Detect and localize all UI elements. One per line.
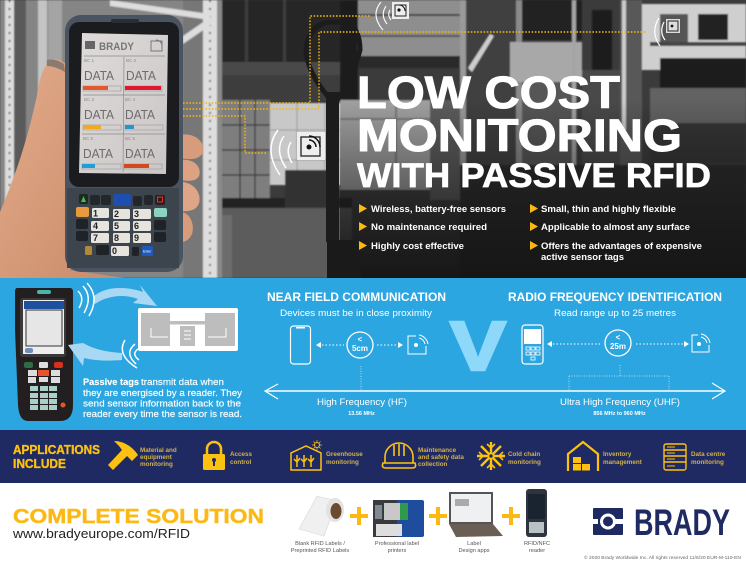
screen: DATA	[83, 146, 113, 161]
heading: applications include	[13, 443, 100, 471]
product captions: Design apps	[458, 548, 490, 554]
product captions: Label	[467, 541, 481, 547]
versus V: V	[450, 307, 506, 385]
label: access control	[230, 451, 253, 466]
keypad	[76, 194, 167, 256]
label: material and equipment: Material and	[140, 447, 177, 454]
feature bullets: active sensor tags	[541, 252, 624, 263]
label: maintenance and safety: collection	[418, 461, 448, 468]
product: label printer	[373, 500, 424, 537]
website url: www.bradyeurope.com/RFID	[12, 527, 190, 541]
label: inventory management: Inventory	[603, 451, 632, 458]
waves from reader	[78, 283, 94, 316]
screen: BC 5	[83, 136, 94, 141]
product captions: RFID/NFC	[524, 541, 550, 547]
keypad: 2	[114, 209, 119, 219]
heading: near field communication: NEAR FIELD COMMUNICATION	[267, 292, 446, 304]
icon: greenhouse	[291, 440, 322, 470]
icon: RFID tag top	[376, 2, 409, 30]
keypad: 8	[114, 233, 119, 243]
icon: lock	[203, 442, 225, 470]
product captions: Blank RFID Labels /	[295, 541, 345, 547]
feature bullets: Wireless, battery-free sensors	[371, 204, 506, 215]
NFC range diagram: <	[358, 335, 363, 344]
hand holding reader	[0, 59, 203, 278]
heading: radio frequency identification	[508, 292, 722, 318]
screen: DATA	[125, 107, 155, 122]
passive tags description: Passive tags	[83, 377, 139, 387]
title: MONITORING	[357, 110, 682, 161]
frequency axis arrow	[265, 365, 725, 399]
label: access control: control	[230, 459, 252, 466]
screen: BC 3	[84, 97, 95, 102]
label: greenhouse monitoring: Greenhouse	[326, 451, 363, 458]
feature bullets: No maintenance required	[371, 222, 487, 233]
screen: DATA	[84, 68, 114, 83]
passive tags description	[83, 377, 242, 419]
heading: near field communication: Devices must be in close proximity	[280, 308, 433, 318]
label: material and equipment: monitoring	[140, 461, 173, 468]
title: WITH PASSIVE RFID	[357, 157, 711, 195]
product: handheld reader	[526, 489, 547, 537]
product captions: Preprinted RFID Labels	[291, 548, 349, 554]
keypad: 0	[112, 246, 117, 256]
label: maintenance and safety	[418, 447, 464, 468]
label: greenhouse monitoring	[326, 451, 363, 466]
passive tags description: reader every time the sensor is read.	[83, 409, 242, 419]
keypad: 3	[134, 209, 139, 219]
label: material and equipment	[140, 447, 177, 468]
keypad: 7	[93, 233, 98, 243]
label: cold chain: Cold chain	[508, 451, 540, 458]
passive tags description: transmit data when	[141, 377, 224, 387]
keypad: 4	[93, 221, 98, 231]
plus	[350, 507, 368, 525]
waves from tag	[122, 340, 140, 368]
screen: DATA	[126, 68, 156, 83]
icon: RFID tag right wall	[655, 18, 680, 46]
copyright: © 2020 Brady Worldwide Inc. All rights reserved 11/6/20 EUR-M-110-EN	[584, 555, 741, 560]
icon: hammer	[108, 441, 138, 470]
heading: near field communication	[267, 292, 446, 318]
icon: RFID tag on tote	[271, 130, 325, 175]
RFID range diagram: <	[616, 333, 621, 342]
screen: BRADY	[99, 41, 135, 53]
heading: complete solution: COMPLETE SOLUTION	[13, 506, 264, 528]
panel: warehouse photo background	[0, 0, 746, 278]
frequency labels: High Frequency (HF)	[317, 397, 407, 407]
feature bullets	[359, 204, 702, 263]
RFID range diagram	[522, 325, 710, 364]
screen: DATA	[84, 107, 114, 122]
product: label roll	[299, 496, 344, 536]
keypad: 6	[134, 221, 139, 231]
arrow: tag to reader	[68, 343, 122, 366]
title: LOW COST	[357, 67, 620, 118]
frequency labels	[317, 397, 680, 417]
keypad: 1	[93, 208, 98, 218]
title	[357, 67, 711, 195]
icon: snowflake	[477, 442, 505, 470]
heading: applications include: INCLUDE	[13, 457, 66, 471]
label: access control: Access	[230, 451, 253, 458]
product: laptop with design app	[449, 492, 503, 537]
NFC range diagram	[290, 326, 428, 364]
icon: warehouse	[568, 442, 598, 471]
illustrated handheld reader	[15, 288, 73, 421]
RFID tag label	[138, 308, 238, 351]
panel: blue comparison section	[0, 278, 746, 430]
plus	[502, 507, 520, 525]
NFC range diagram: 5cm	[352, 344, 368, 353]
feature bullets: Offers the advantages of expensive	[541, 241, 702, 252]
arrow: reader to tag	[93, 285, 157, 306]
feature bullets: Highly cost effective	[371, 241, 464, 252]
label: material and equipment: equipment	[140, 454, 173, 461]
screen: BC 2	[126, 58, 137, 63]
label: maintenance and safety: and safety data	[418, 454, 464, 461]
label: cold chain: monitoring	[508, 459, 541, 466]
feature bullets: Applicable to almost any surface	[541, 222, 690, 233]
label: cold chain	[508, 451, 541, 466]
label: inventory management	[603, 451, 643, 466]
handheld RFID reader	[65, 15, 183, 272]
screen	[79, 33, 168, 174]
keypad: 9	[134, 233, 139, 243]
heading: radio frequency identification: Read range up to 25 metres	[554, 308, 677, 318]
label: data centre: monitoring	[691, 459, 724, 466]
frequency labels: 13.56 MHz	[348, 411, 375, 417]
panel: complete solution footer	[0, 483, 746, 561]
heading: radio frequency identification: RADIO FREQUENCY IDENTIFICATION	[508, 292, 722, 304]
passive tags description: send sensor information back to the	[83, 398, 241, 408]
screen: DATA	[125, 146, 155, 161]
keypad: Enter	[143, 250, 152, 254]
label: greenhouse monitoring: monitoring	[326, 459, 359, 466]
RFID range diagram: 25m	[610, 342, 626, 351]
Brady logo	[593, 502, 730, 543]
screen: BC 5	[125, 136, 136, 141]
product captions	[291, 541, 550, 554]
icon: hard hat	[382, 443, 416, 468]
feature bullets: Small, thin and highly flexible	[541, 204, 676, 215]
label: inventory management: management	[603, 459, 643, 466]
product captions: reader	[529, 548, 545, 554]
product captions: Professional label	[375, 541, 419, 547]
plus	[429, 507, 447, 525]
screen: BC 4	[125, 97, 136, 102]
label: data centre	[691, 451, 726, 466]
frequency labels: Ultra High Frequency (UHF)	[560, 397, 680, 407]
product captions: printers	[388, 548, 407, 554]
label: maintenance and safety: Maintenance	[418, 447, 457, 454]
icon: server rack	[664, 444, 686, 470]
panel: applications band	[0, 430, 746, 483]
keypad: 5	[114, 221, 119, 231]
frequency labels: 856 MHz to 960 MHz	[593, 411, 646, 417]
heading: applications include: APPLICATIONS	[13, 443, 100, 457]
label: data centre: Data centre	[691, 451, 726, 458]
yellow dotted connector lines	[183, 16, 646, 153]
passive tags description: they are energised by a reader. They	[83, 388, 242, 398]
screen: BC 1	[84, 58, 95, 63]
